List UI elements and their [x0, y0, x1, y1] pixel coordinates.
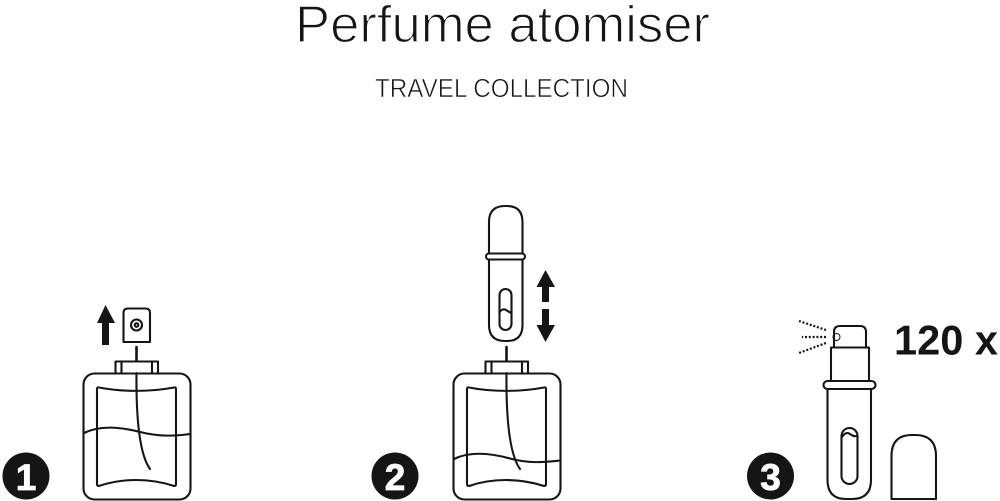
step 1 number badge: 1	[16, 457, 36, 498]
step 2 up and down arrows	[536, 270, 555, 342]
step 1 number badge	[2, 452, 50, 500]
step 2 perfume bottle	[454, 347, 560, 500]
step 3 spray dots	[799, 321, 826, 353]
step 1	[2, 305, 190, 500]
step 2 number badge	[372, 452, 418, 500]
step 1 perfume bottle	[84, 347, 190, 500]
step 3 number badge: 3	[760, 457, 781, 498]
step 1 up arrow	[97, 305, 115, 345]
step 3 removed cap	[892, 435, 936, 499]
usage count label: 120 x	[894, 316, 999, 364]
subtitle: TRAVEL COLLECTION	[375, 75, 628, 103]
step 2 atomiser	[486, 206, 525, 341]
step 2	[372, 206, 560, 500]
step 3 atomiser with spray head	[824, 326, 876, 499]
step 3 number badge	[747, 452, 794, 500]
step 2 number badge: 2	[385, 457, 405, 498]
step 1 spray cap	[124, 308, 150, 342]
step 3	[747, 316, 999, 500]
